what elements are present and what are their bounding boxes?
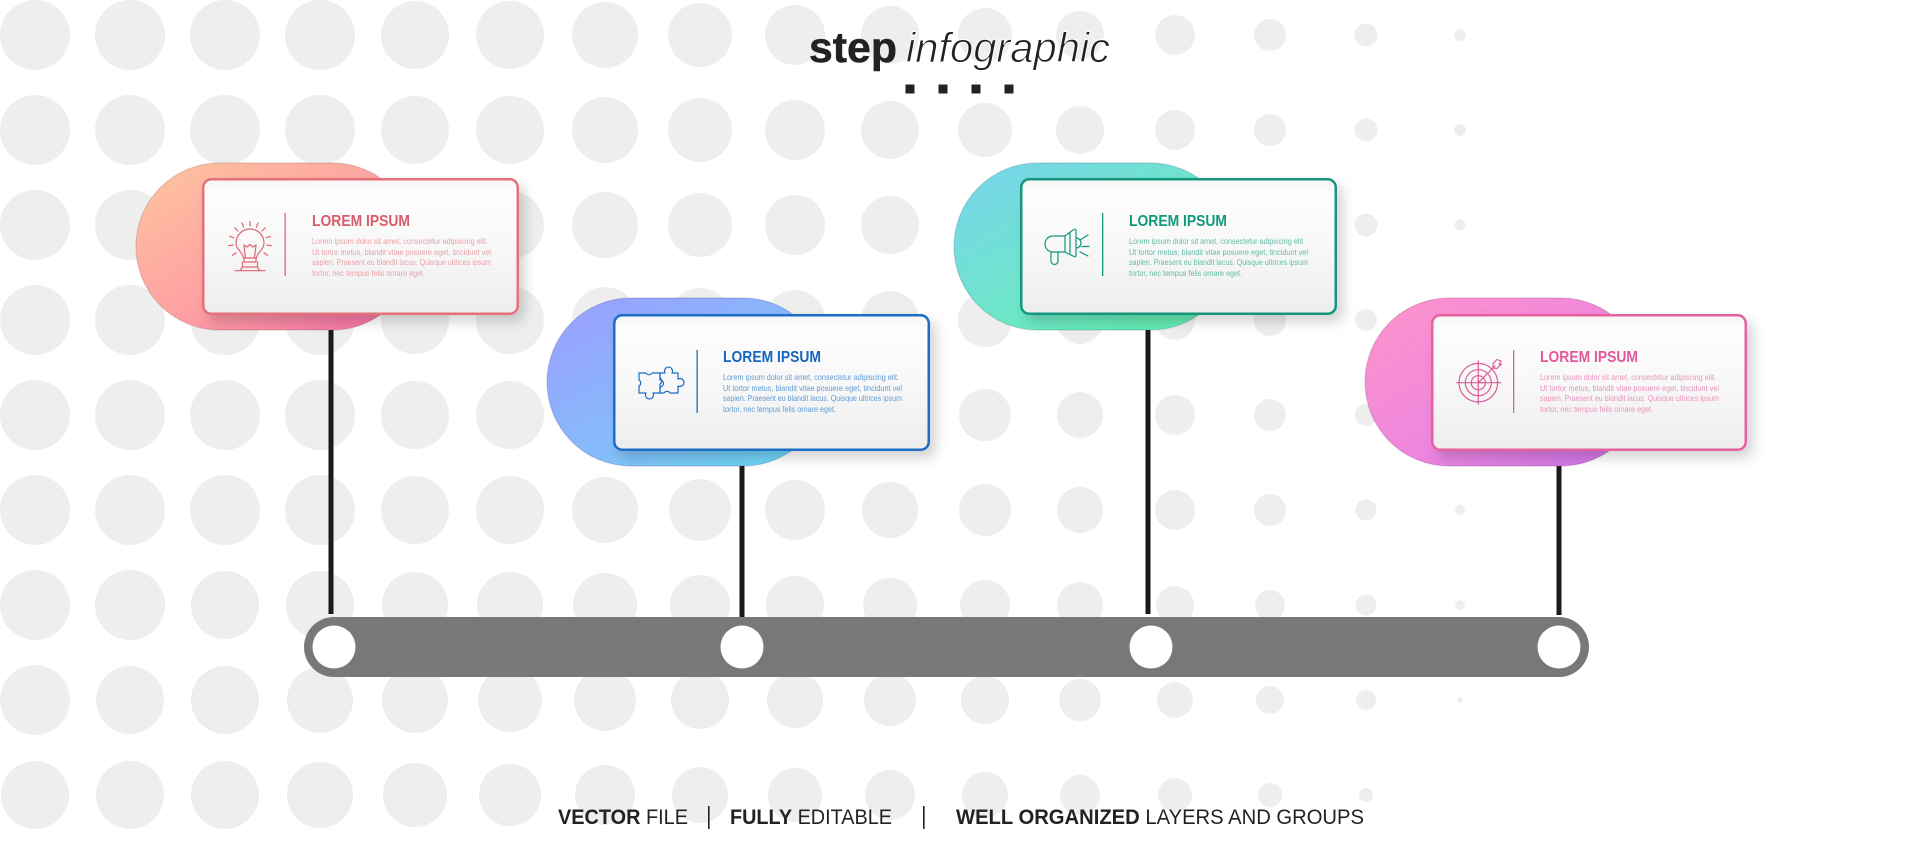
divider [284,213,286,276]
footer caption: FULLY EDITABLE [730,806,892,829]
icon: megaphone [1045,229,1089,264]
card [203,179,518,314]
card [1021,179,1336,314]
timeline node 4 [1538,626,1580,668]
body text: Lorem ipsum dolor sit amet, consectetur adipiscing elit. [1129,236,1305,246]
body text: Ut tortor metus, blandit vitae posuere eget, tincidunt vel [1129,247,1308,257]
title: step [809,24,897,72]
timeline connector stems [328,328,1562,622]
card [1432,315,1746,450]
title [809,24,1110,72]
body text: Ut tortor metus, blandit vitae posuere eget, tincidunt vel [723,383,902,393]
body text: sapien. Praesent eu blandit lacus. Quisque ultrices ipsum [1129,257,1308,267]
icon: target with arrow [1457,360,1502,404]
background dot pattern [0,0,1466,829]
heading: LOREM IPSUM [1129,213,1227,230]
timeline bar [304,617,1589,677]
divider [1513,350,1514,413]
panel: step 3 megaphone [954,163,1336,330]
heading: LOREM IPSUM [1540,349,1638,366]
footer caption: VECTOR FILE [558,806,688,829]
title square markers [906,84,1014,94]
card [614,315,929,450]
body text: Ut tortor metus, blandit vitae posuere eget, tincidunt vel [312,247,491,257]
body text [723,372,902,414]
heading: LOREM IPSUM [723,349,821,366]
body text: tortor, nec tempus felis ornare eget. [1540,404,1653,414]
body text: Lorem ipsum dolor sit amet, consectetur adipiscing elit. [312,236,488,246]
gradient pill [547,298,827,466]
body text: Lorem ipsum dolor sit amet, consectetur adipiscing elit. [1540,372,1716,382]
gradient pill [1365,298,1645,466]
panel: step 1 idea [136,163,518,330]
body text [312,236,491,278]
body text: tortor, nec tempus felis ornare eget. [1129,268,1242,278]
title: infographic [906,24,1110,71]
body text: sapien. Praesent eu blandit lacus. Quisque ultrices ipsum [723,393,902,403]
body text: sapien. Praesent eu blandit lacus. Quisque ultrices ipsum [1540,393,1719,403]
body text: tortor, nec tempus felis ornare eget. [312,268,425,278]
divider [696,350,698,413]
body text [1540,372,1719,414]
icon: light bulb [229,222,271,271]
divider [1102,213,1103,276]
body text: sapien. Praesent eu blandit lacus. Quisque ultrices ipsum [312,257,491,267]
body text [1129,236,1308,278]
timeline node 1 [312,626,356,668]
gradient pill [136,163,416,330]
body text: tortor, nec tempus felis ornare eget. [723,404,836,414]
gradient pill [954,163,1234,330]
panel: step 2 puzzle [547,298,929,466]
body text: Ut tortor metus, blandit vitae posuere eget, tincidunt vel [1540,383,1719,393]
body text: Lorem ipsum dolor sit amet, consectetur adipiscing elit. [723,372,899,382]
heading: LOREM IPSUM [312,213,410,230]
timeline node 2 [720,626,764,668]
footer caption: WELL ORGANIZED LAYERS AND GROUPS [956,806,1364,829]
footer caption [558,806,1364,829]
icon: puzzle pieces [639,367,684,399]
panel: step 4 target [1365,298,1746,466]
timeline node 3 [1130,626,1172,668]
